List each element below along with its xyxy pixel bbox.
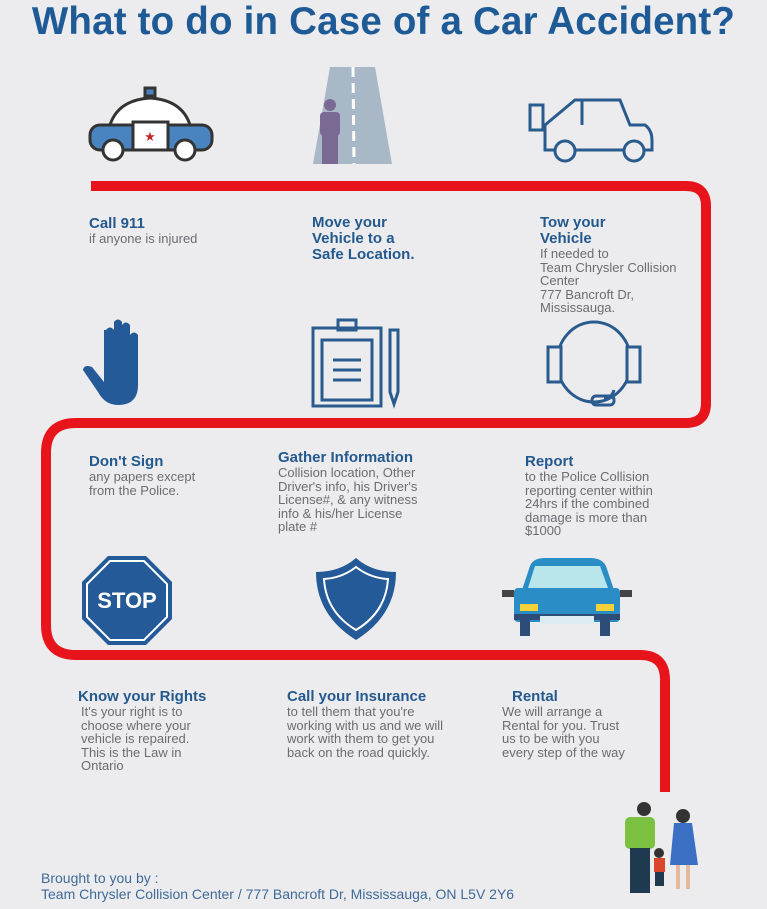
step: gather info: Gather Information bbox=[278, 449, 413, 466]
icon: road bbox=[313, 67, 392, 164]
step: rental: We will arrange a bbox=[502, 704, 602, 719]
step: rights: Ontario bbox=[81, 758, 124, 773]
step: gather info: info & his/her License bbox=[278, 506, 402, 520]
step: don't sign: any papers except bbox=[89, 469, 195, 484]
step: insurance: work with them to get you bbox=[287, 731, 434, 746]
step: insurance: to tell them that you're bbox=[287, 704, 414, 719]
step: call 911: Call 911 bbox=[89, 215, 145, 232]
footer bbox=[41, 870, 514, 902]
step: tow: If needed to bbox=[540, 246, 609, 261]
step: rental: us to be with you bbox=[502, 731, 600, 746]
icon: headset bbox=[548, 322, 640, 405]
graphics: STOP bbox=[97, 588, 157, 613]
step: move vehicle: Vehicle to a bbox=[312, 230, 395, 247]
step: don't sign bbox=[89, 453, 196, 498]
step: report: damage is more than bbox=[525, 510, 647, 524]
footer: Team Chrysler Collision Center / 777 Bancroft Dr, Mississauga, ON L5V 2Y6 bbox=[41, 886, 514, 902]
step: report bbox=[525, 453, 653, 538]
step: don't sign: from the Police. bbox=[89, 482, 179, 498]
graphics: ★ bbox=[144, 129, 156, 144]
icon: family bbox=[625, 802, 698, 893]
step: don't sign: Don't Sign bbox=[89, 453, 163, 470]
icon: police car bbox=[90, 88, 212, 160]
icon: clipboard bbox=[313, 320, 398, 406]
step: rights: This is the Law in bbox=[81, 744, 181, 760]
step: insurance: Call your Insurance bbox=[287, 688, 426, 705]
step: tow: Tow your bbox=[540, 214, 606, 231]
step: report: to the Police Collision bbox=[525, 469, 649, 484]
step: gather info bbox=[278, 449, 417, 534]
title: What to do in Case of a Car Accident? bbox=[32, 0, 735, 43]
step: rental bbox=[502, 688, 625, 760]
step: move vehicle: Safe Location. bbox=[312, 246, 415, 263]
step: tow: Vehicle bbox=[540, 230, 592, 247]
step: tow: 777 Bancroft Dr, bbox=[540, 286, 634, 302]
step: gather info: Collision location, Other bbox=[278, 465, 415, 480]
step: rental: Rental for you. Trust bbox=[502, 718, 619, 732]
step: report: reporting center within bbox=[525, 482, 653, 498]
icon: blue car bbox=[502, 558, 632, 636]
step: gather info: License#, & any witness bbox=[278, 492, 417, 507]
icon: tow car bbox=[530, 100, 652, 161]
step: gather info: Driver's info, his Driver's bbox=[278, 478, 417, 494]
step: rights: Know your Rights bbox=[78, 688, 206, 705]
step: move vehicle bbox=[312, 214, 415, 263]
step: insurance bbox=[287, 688, 443, 760]
footer: Brought to you by : bbox=[41, 870, 159, 886]
step: rights: choose where your bbox=[81, 718, 191, 732]
icon: shield bbox=[316, 558, 396, 640]
step: rental: Rental bbox=[512, 688, 558, 705]
icon: stop sign bbox=[82, 556, 172, 645]
step: tow: Center bbox=[540, 273, 579, 288]
step: rights: It's your right is to bbox=[81, 704, 182, 719]
red path bbox=[46, 186, 706, 792]
step: call 911 bbox=[89, 215, 197, 246]
step: rights: vehicle is repaired. bbox=[81, 731, 189, 746]
step: move vehicle: Move your bbox=[312, 214, 387, 231]
step: call 911: if anyone is injured bbox=[89, 231, 197, 246]
step: tow: Team Chrysler Collision bbox=[540, 260, 677, 274]
step: rights bbox=[78, 688, 206, 773]
step: tow bbox=[540, 214, 677, 315]
step: insurance: back on the road quickly. bbox=[287, 744, 430, 760]
step: report: 24hrs if the combined bbox=[525, 496, 649, 511]
step: insurance: working with us and we will bbox=[287, 718, 443, 732]
step: report: Report bbox=[525, 453, 573, 470]
step: gather info: plate # bbox=[278, 519, 317, 534]
step: rental: every step of the way bbox=[502, 744, 625, 760]
icon: hand bbox=[83, 320, 138, 405]
step: tow: Mississauga. bbox=[540, 300, 615, 315]
step: report: $1000 bbox=[525, 523, 561, 538]
